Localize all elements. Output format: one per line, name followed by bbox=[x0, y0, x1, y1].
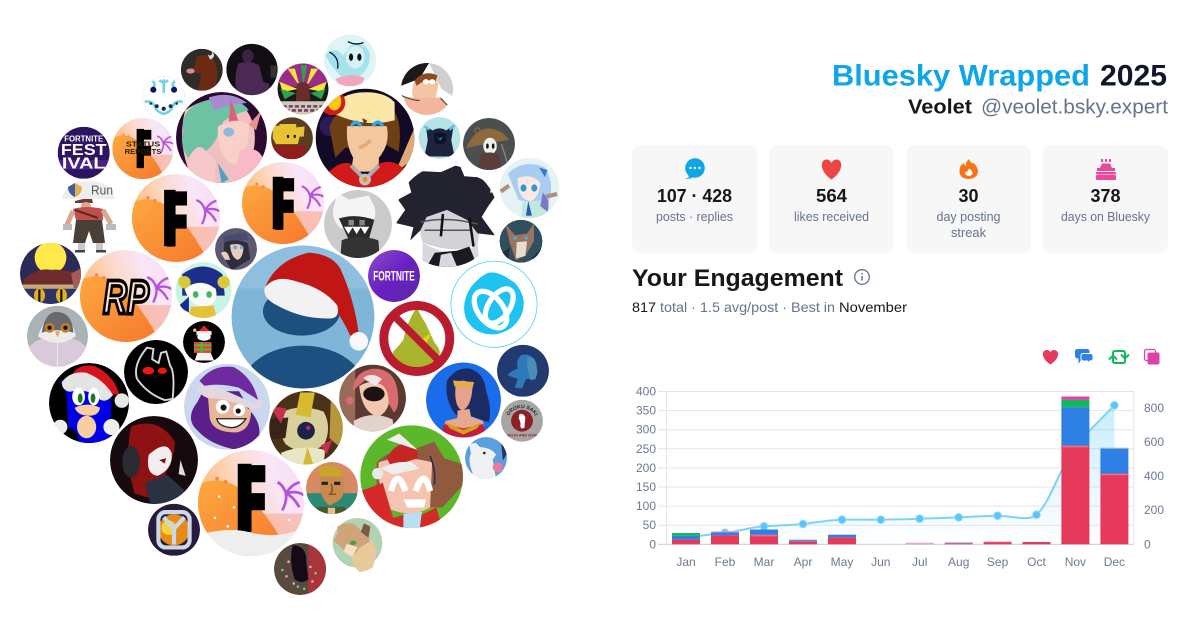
icon: heart bbox=[822, 160, 841, 180]
left axis labels bbox=[636, 384, 656, 551]
right axis labels: 800 bbox=[1144, 401, 1164, 415]
avatar: plush toy bbox=[269, 391, 343, 465]
combined chart: monthly engagement bars and cumulative line bbox=[636, 384, 1164, 569]
icon: quotes squares bbox=[1144, 350, 1160, 364]
avatar: Fortnite purple logo bbox=[368, 250, 420, 302]
avatar: scout with Run button: Run bbox=[91, 182, 113, 198]
avatar: Fortnite F large left: F bbox=[166, 178, 187, 259]
avatar: light blue hair anime girl bbox=[500, 158, 560, 218]
avatar: black mask red eyes bbox=[124, 340, 188, 404]
left axis labels: 200 bbox=[636, 461, 656, 475]
right axis labels: 400 bbox=[1144, 469, 1164, 483]
user name and handle bbox=[908, 96, 1168, 118]
icon: likes heart bbox=[1043, 350, 1058, 364]
month labels: Dec bbox=[1104, 555, 1125, 569]
avatar: owl in puffer jacket bbox=[27, 306, 88, 367]
left axis labels: 150 bbox=[636, 480, 656, 494]
icon: cake bbox=[1096, 159, 1116, 180]
avatar: hooded figure bbox=[418, 117, 460, 159]
heading: Your Engagement: Your Engagement bbox=[632, 265, 843, 292]
avatar: mushroom hat traveler bbox=[463, 118, 515, 170]
engagement summary: 817 bbox=[632, 299, 656, 315]
card: likes received bbox=[769, 145, 894, 253]
chart legend icons bbox=[1043, 349, 1160, 364]
avatar: Fortnite purple logo: FORTNITE bbox=[373, 268, 415, 284]
avatar: Oroku Saki badge bbox=[501, 400, 543, 442]
avatar: Bluesky Wrapped logo ring bbox=[451, 261, 537, 347]
bar: Dec bbox=[1100, 448, 1128, 544]
avatar: brown cow bbox=[181, 49, 223, 91]
bar: Jan bbox=[672, 533, 700, 544]
avatar: Fortnite Festival: FORTNITE bbox=[64, 134, 103, 143]
avatar: wolf portrait bbox=[500, 220, 542, 263]
card: posting streak: streak bbox=[951, 226, 987, 240]
left axis labels: 350 bbox=[636, 404, 656, 418]
avatar: Jonesy bbox=[306, 462, 358, 514]
avatar: crossed out Grinch bbox=[379, 301, 454, 376]
avatar: dark spiky hair character bbox=[396, 164, 498, 267]
card: days on Bluesky: 378 bbox=[1090, 186, 1120, 206]
avatar: tree with lights bbox=[274, 543, 326, 595]
right axis labels: 200 bbox=[1144, 503, 1164, 517]
stacked bars bbox=[672, 396, 1128, 544]
month labels: Oct bbox=[1027, 555, 1046, 569]
avatar: cyan rorschach bbox=[142, 76, 185, 119]
avatar: dark purple figure bbox=[226, 44, 278, 95]
avatar: grey white masked cat bbox=[324, 190, 392, 258]
card: posts and replies bbox=[632, 145, 757, 253]
month labels: Jun bbox=[871, 555, 890, 569]
card: posting streak: 30 bbox=[958, 186, 978, 206]
card: days on Bluesky: days on Bluesky bbox=[1061, 210, 1151, 224]
card: likes received: 564 bbox=[816, 186, 847, 206]
title: 2025 bbox=[1100, 60, 1167, 92]
month labels: Sep bbox=[987, 555, 1009, 569]
bar: Apr bbox=[789, 540, 817, 544]
avatar: Fortnite Festival bbox=[58, 127, 110, 179]
card: posting streak bbox=[906, 145, 1031, 253]
left axis labels: 300 bbox=[636, 423, 656, 437]
month labels: Jul bbox=[912, 555, 927, 569]
bar: Mar bbox=[750, 530, 778, 544]
bar: Aug bbox=[945, 542, 973, 544]
avatar: white and blue cat girl bbox=[176, 262, 232, 318]
icon: flame bbox=[959, 159, 978, 179]
avatar: Sonic with Santa hat bbox=[49, 363, 129, 443]
left axis labels: 100 bbox=[636, 499, 656, 513]
month labels: Aug bbox=[948, 555, 969, 569]
avatar: Oroku Saki badge: DOJO AND GYM bbox=[507, 434, 537, 438]
card: posts and replies: posts · replies bbox=[656, 210, 733, 224]
bar: Jul bbox=[906, 542, 934, 544]
avatar: cat under a glowing orb bbox=[20, 242, 82, 304]
grid lines bbox=[658, 392, 1134, 544]
bar: May bbox=[828, 535, 856, 544]
avatar: eyepatch character bbox=[339, 365, 406, 431]
bar: Sep bbox=[984, 541, 1012, 544]
icon: replies bubbles bbox=[1075, 349, 1093, 364]
avatar: status reports: REPORTS bbox=[125, 147, 161, 156]
left axis labels: 0 bbox=[649, 537, 656, 551]
avatar: Fortnite Festival: IVAL bbox=[62, 155, 106, 172]
avatar: green background Christmas character bbox=[360, 425, 463, 528]
panel: stat cards bbox=[632, 145, 1168, 253]
right axis labels: 0 bbox=[1144, 537, 1151, 551]
avatar: snowy Fortnite F: F bbox=[240, 452, 265, 548]
avatar: Fortnite F large left bbox=[130, 174, 222, 264]
avatar: scout with Run button bbox=[62, 181, 116, 252]
avatar: blue profile silhouette bbox=[497, 345, 549, 397]
avatar: snowy Fortnite F bbox=[196, 450, 306, 558]
cumulative line with area bbox=[686, 402, 1118, 544]
card: posts and replies: 107 · 428 bbox=[657, 186, 732, 206]
right axis labels bbox=[1144, 401, 1164, 551]
avatar: santa pixel gift bbox=[183, 321, 225, 363]
month labels bbox=[676, 555, 1125, 569]
avatar: colourful album cover bbox=[278, 64, 328, 114]
card: likes received: likes received bbox=[794, 210, 869, 224]
avatar: tan cat bbox=[330, 518, 384, 572]
engagement summary bbox=[632, 299, 907, 315]
card: posting streak: day posting bbox=[936, 210, 1001, 224]
avatar: Fortnite Festival: FEST bbox=[61, 142, 107, 159]
left axis labels: 50 bbox=[643, 518, 656, 532]
avatar: purple haired girl with hat bbox=[184, 364, 270, 450]
avatar: RP logo bbox=[78, 250, 174, 344]
avatar: RP logo: RP bbox=[103, 271, 149, 324]
avatar: Moomin bbox=[465, 437, 507, 479]
month labels: Nov bbox=[1065, 555, 1086, 569]
bar: Nov bbox=[1061, 396, 1089, 544]
title: Bluesky Wrapped bbox=[832, 60, 1090, 92]
avatar: status reports bbox=[111, 118, 175, 180]
icon: chat bubble bbox=[685, 158, 705, 179]
month labels: Apr bbox=[794, 555, 812, 569]
right axis labels: 600 bbox=[1144, 435, 1164, 449]
avatar: yellow pixel bear bbox=[271, 117, 313, 159]
avatar: status reports: STATUS bbox=[126, 140, 160, 149]
avatar: blonde drawn face bbox=[316, 89, 414, 187]
icon: info bbox=[855, 270, 869, 284]
icon: reposts arrows bbox=[1109, 351, 1129, 363]
month labels: Jan bbox=[676, 555, 696, 569]
month labels: Mar bbox=[754, 555, 774, 569]
card: days on Bluesky bbox=[1043, 145, 1168, 253]
avatar: boy with glasses bbox=[215, 228, 257, 270]
bar: Feb bbox=[711, 531, 739, 544]
bar: Oct bbox=[1022, 542, 1050, 544]
avatar: status reports: F bbox=[138, 122, 151, 178]
avatar: Fortnite F large right bbox=[240, 162, 326, 246]
month labels: May bbox=[831, 555, 853, 569]
avatar: default profile with Santa hat bbox=[232, 246, 374, 388]
engagement summary: November bbox=[839, 299, 907, 315]
user name and handle: @veolet.bsky.expert bbox=[981, 96, 1168, 118]
user name and handle: Veolet bbox=[908, 96, 972, 118]
left axis labels: 400 bbox=[636, 384, 656, 398]
avatar: oni girl with teal hair bbox=[176, 92, 267, 183]
month labels: Feb bbox=[715, 555, 736, 569]
avatar: Y shield logo bbox=[148, 504, 200, 556]
left axis labels: 250 bbox=[636, 442, 656, 456]
panel: avatar bubble cluster bbox=[20, 34, 560, 595]
engagement summary: total · 1.5 avg/post · Best in bbox=[660, 299, 835, 315]
avatar: Peter Griffin bbox=[401, 63, 453, 116]
avatar: Fortnite F large right: F bbox=[275, 168, 294, 242]
avatar: Wonder Woman bbox=[426, 362, 501, 438]
avatar: Oroku Saki badge: OROKU SAKI bbox=[506, 404, 538, 416]
avatar: red haired anime bbox=[110, 416, 198, 504]
avatar: blue comic character bbox=[324, 34, 376, 87]
